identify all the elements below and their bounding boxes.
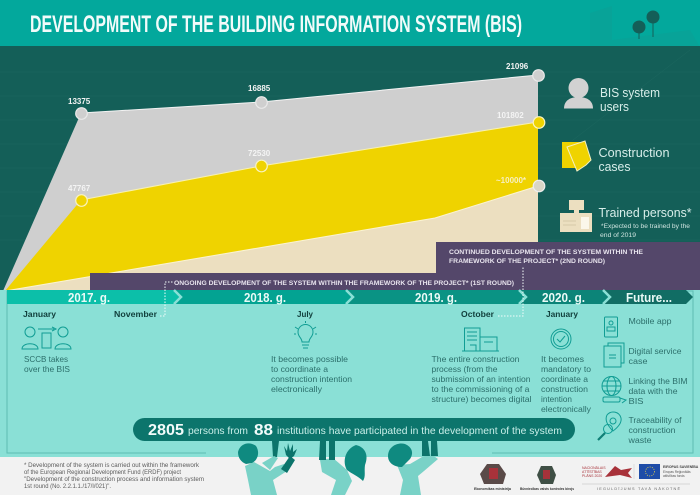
legend: trained persons [560, 200, 692, 239]
logo: State Construction Control Bureau: Būvniecības valsts kontroles birojs [520, 487, 574, 491]
header band [0, 0, 700, 47]
area chart [3, 62, 545, 291]
event: January 2017: January [23, 309, 56, 319]
event: November 2017: November [114, 309, 158, 319]
data points: cases [76, 117, 545, 206]
year: 2017 [7, 290, 181, 304]
future: digital service case: case [628, 356, 648, 366]
legend: trained persons: *Expected to be trained by the [601, 224, 691, 230]
data point: trained [533, 180, 545, 192]
legend: trained persons: Trained persons* [598, 206, 692, 220]
project band: 1st round [90, 273, 514, 291]
legend: BIS system users: users [600, 100, 629, 114]
timeline arrows: 2017. g. [68, 290, 110, 305]
value labels [68, 62, 529, 193]
area: trained persons [5, 186, 538, 291]
year: 2018 [174, 290, 353, 304]
event: October 2019: process (from the [432, 364, 498, 374]
event: January 2020: January [546, 309, 578, 319]
participation banner [133, 418, 575, 441]
event: January 2020: mandatory to [541, 364, 591, 374]
future: mobile app [604, 316, 672, 337]
legend: construction cases: cases [598, 160, 630, 174]
event: October 2019: submission of an intention [432, 374, 531, 384]
legend: construction cases [562, 141, 670, 174]
icon: phone [604, 317, 618, 337]
logo: State Construction Control Bureau [520, 466, 574, 491]
event: January 2017: over the BIS [24, 364, 70, 374]
dotted connectors [160, 267, 523, 316]
event: October 2019 [432, 309, 532, 404]
event: January 2020 [541, 309, 592, 414]
future: traceability of waste [598, 412, 682, 445]
footnote: of the European Regional Development Fund (ERDF) project [24, 470, 181, 476]
icon: documents [562, 141, 591, 171]
event: January 2017: SCCB takes [24, 354, 68, 364]
icon: documents [604, 343, 624, 367]
project band: 2nd round [436, 242, 700, 291]
icon: handover [22, 327, 71, 349]
event: January 2020: intention [541, 394, 572, 404]
timeline panel [0, 290, 700, 457]
future: linking BIM data: BIS [628, 396, 644, 406]
future: traceability of waste: waste [627, 435, 652, 445]
participation banner: institutions have participated in the development of the system [277, 425, 562, 437]
legend: BIS system users: BIS system [600, 86, 660, 100]
future: traceability of waste: construction [628, 425, 676, 435]
project band: 1st round: ONGOING DEVELOPMENT OF THE SYSTEM WITHIN THE FRAMEWORK OF THE PROJECT* (1ST ROUND) [174, 280, 514, 287]
value labels: 47767 [68, 184, 91, 193]
icon: check seal [551, 329, 571, 349]
participation banner: 88 [254, 422, 273, 439]
legend: BIS system users [564, 78, 660, 114]
future: mobile app: Mobile app [628, 316, 672, 326]
slogan: IEGULDĪJUMS TAVĀ NĀKOTNĒ [597, 487, 680, 491]
year: 2020 [519, 290, 610, 304]
event: October 2019: October [461, 309, 495, 319]
value labels: 16885 [248, 84, 271, 93]
future: linking BIM data [602, 376, 688, 406]
icon: buildings [462, 328, 499, 351]
timeline arrows: 2020. g. [542, 290, 585, 305]
illustration: people holding banner [206, 441, 492, 495]
logo: Ministry of Economics: Ekonomikas ministrija [474, 487, 512, 491]
event: July 2018: July [297, 309, 313, 319]
timeline arrows: Future... [626, 290, 672, 305]
logo: national development plan: ATTĪSTĪBAS [582, 470, 602, 474]
value labels: 101802 [497, 111, 524, 120]
event: January 2020: coordinate a [541, 374, 588, 384]
year: 2019 [346, 290, 526, 304]
footnote: "Development of the construction process and information system [24, 477, 204, 483]
value labels: ~10000* [496, 176, 527, 185]
timeline arrows: 2019. g. [415, 290, 457, 305]
area: construction cases [5, 122, 538, 291]
dark chart background [0, 46, 700, 291]
footnote [24, 463, 204, 490]
icon: user [564, 78, 593, 108]
logo: European Union flag: EIROPAS SAVIENĪBA [663, 465, 699, 469]
future: linking BIM data: data with the [628, 386, 678, 396]
event: October 2019: to the commissioning of a [432, 384, 530, 394]
event: July 2018: construction intention [271, 374, 352, 384]
future: digital service case [604, 343, 682, 367]
logo: European Union flag: Eiropas Reģionālās [663, 469, 691, 474]
icon: magnifier and pin [598, 412, 621, 440]
person 3 [388, 441, 438, 495]
event: July 2018 [271, 309, 352, 394]
logo: national development plan: PLĀNS 2020 [582, 474, 602, 478]
area: BIS system users [3, 75, 538, 291]
project band: 2nd round: FRAMEWORK OF THE PROJECT* (2ND ROUND) [449, 258, 605, 265]
logo: European Union flag [639, 464, 699, 479]
participation banner: persons from [188, 425, 248, 437]
logo: national development plan [582, 464, 634, 479]
logo: national development plan: NACIONĀLAIS [582, 466, 606, 470]
future: digital service case: Digital service [628, 346, 682, 356]
footnote: 1st round (No. 2.2.1.1./17/I/021)". [24, 484, 111, 490]
event: July 2018: electronically [271, 384, 323, 394]
event: October 2019: structure) becomes digital [432, 394, 532, 404]
timeline arrows [7, 290, 693, 305]
legend: trained persons: end of 2019 [600, 233, 637, 239]
icon: globe [602, 376, 626, 403]
event: January 2020: electronically [541, 404, 592, 414]
timeline arrows: 2018. g. [244, 290, 286, 305]
person 1 [238, 441, 297, 495]
event: July 2018: to coordinate a [271, 364, 328, 374]
future: traceability of waste: Traceability of [628, 415, 682, 425]
icon: desk [560, 200, 592, 232]
project band: 2nd round: CONTINUED DEVELOPMENT OF THE SYSTEM WITHIN THE [449, 249, 644, 256]
logo: Ministry of Economics [474, 464, 512, 491]
value labels: 13375 [68, 97, 91, 106]
event: January 2020: construction [541, 384, 588, 394]
participation banner: 2805 [148, 422, 184, 439]
logo: European Union flag: attīstības fonds [663, 474, 685, 478]
icon: light bulb [294, 321, 317, 348]
value labels: 21096 [506, 62, 529, 71]
event: July 2018: It becomes possible [271, 354, 348, 364]
event: October 2019: The entire construction [432, 354, 520, 364]
value labels: 72530 [248, 149, 271, 158]
person 2 [319, 441, 367, 495]
event: January 2020: It becomes [541, 354, 584, 364]
data points: users [76, 70, 544, 119]
year: future [603, 290, 693, 304]
slogan [582, 484, 690, 491]
footnote: * Development of the system is carried out within the framework [24, 463, 200, 469]
future: linking BIM data: Linking the BIM [628, 376, 688, 386]
legend: construction cases: Construction [598, 146, 670, 160]
event: January 2017 [22, 309, 71, 374]
